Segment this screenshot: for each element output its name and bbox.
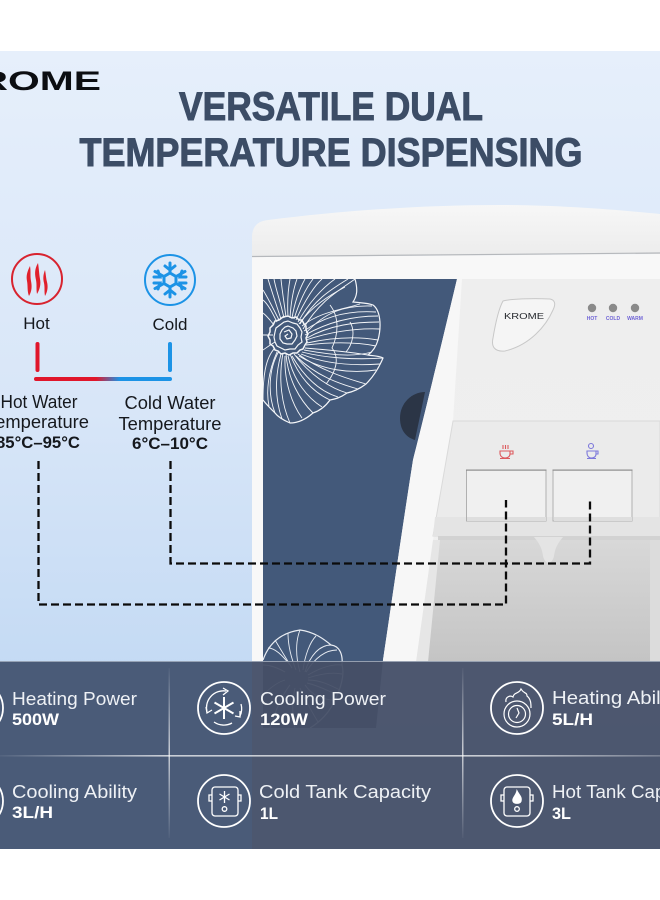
hot water temperature text: Hot Water xyxy=(0,392,78,412)
title: TEMPERATURE DISPENSING xyxy=(80,131,582,175)
cold icon xyxy=(145,255,195,305)
spec: hot tank capacity xyxy=(491,775,660,827)
cold cup icon xyxy=(587,444,598,458)
cold button xyxy=(552,470,632,521)
spec: cooling power xyxy=(198,682,386,734)
knob xyxy=(400,392,425,440)
spec: cooling ability xyxy=(0,775,138,827)
cold water temperature text: 6°C–10°C xyxy=(132,434,208,453)
cold water temperature text: Temperature xyxy=(118,414,222,434)
dispenser ledge xyxy=(433,517,660,536)
dispenser lid xyxy=(252,205,660,257)
spec band xyxy=(0,661,660,849)
spec: cooling ability: Cooling Ability xyxy=(12,781,138,802)
cold water temperature text xyxy=(118,393,222,453)
spec: cooling power: 120W xyxy=(260,710,309,729)
dashed connector: hot xyxy=(38,461,506,604)
spec: heating power xyxy=(0,682,137,734)
spec: cold tank capacity xyxy=(198,775,432,827)
indicator lights xyxy=(587,304,643,322)
indicator lights: COLD xyxy=(606,316,620,322)
spec: hot tank capacity: 3L xyxy=(552,804,571,823)
spec: cold tank capacity: 1L xyxy=(260,804,278,823)
recess xyxy=(424,540,650,662)
water dispenser xyxy=(252,205,660,661)
nozzle xyxy=(534,537,563,563)
title xyxy=(80,85,582,175)
flower bottom xyxy=(263,630,343,728)
hot label: Hot xyxy=(23,314,50,333)
flower top xyxy=(263,279,383,423)
front control area xyxy=(416,279,660,662)
hot icon xyxy=(12,254,62,304)
cold water temperature text: Cold Water xyxy=(124,393,216,413)
temperature connector xyxy=(34,344,172,381)
white side curve xyxy=(383,279,462,662)
indicator lights: WARM xyxy=(627,316,643,322)
flower panel xyxy=(263,279,457,661)
spec: heating ability: 5L/H xyxy=(552,710,593,729)
spec: cold tank capacity: Cold Tank Capacity xyxy=(259,781,432,802)
logo badge xyxy=(492,299,555,351)
dispenser body xyxy=(252,254,660,662)
indicator lights: HOT xyxy=(587,316,597,322)
spec: heating power: Heating Power xyxy=(12,688,137,709)
cold label: Cold xyxy=(153,315,187,334)
hot button xyxy=(466,470,546,521)
dashed connector: cold xyxy=(170,461,590,564)
spec: cooling power: Cooling Power xyxy=(260,688,386,709)
hot water temperature text xyxy=(0,392,89,452)
title: VERSATILE DUAL xyxy=(179,85,483,129)
logo badge: KROME xyxy=(504,312,544,321)
spec: heating power: 500W xyxy=(12,710,60,729)
hot cup icon xyxy=(500,445,513,458)
spec: heating ability xyxy=(491,682,660,734)
spec: cooling ability: 3L/H xyxy=(12,803,53,822)
button housing xyxy=(433,421,660,536)
